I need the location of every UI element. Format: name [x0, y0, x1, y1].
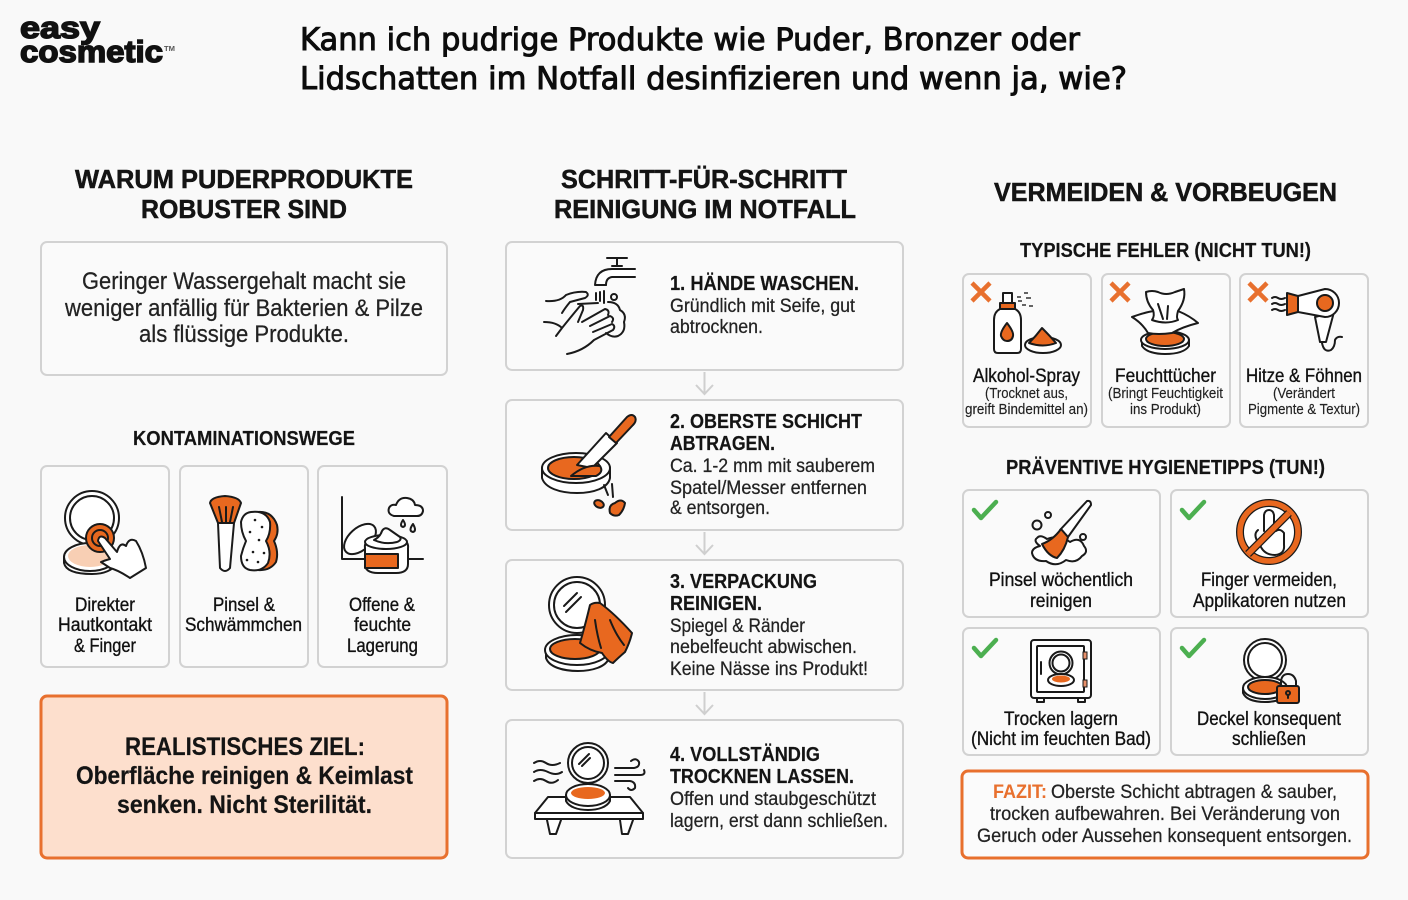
label: Applikatoren nutzen — [1193, 591, 1346, 612]
step text: Spatel/Messer entfernen — [670, 478, 867, 499]
card: alkohol-spray — [963, 274, 1091, 427]
icon: jar and cloud — [339, 497, 423, 573]
label: schließen — [1232, 729, 1306, 750]
card: hitze und foehnen — [1240, 274, 1368, 427]
label — [1197, 709, 1342, 750]
step text — [670, 272, 859, 338]
text block: geringer wassergehalt: weniger anfällig für Bakterien & Pilze — [64, 295, 423, 322]
heading: kontaminationswege: KONTAMINATIONSWEGE — [133, 428, 355, 450]
callout: fazit: trocken aufbewahren. Bei Veränderung von — [990, 803, 1340, 825]
step 1 card — [506, 242, 903, 370]
label: Schwämmchen — [185, 615, 302, 636]
callout: fazit: FAZIT: — [993, 781, 1047, 803]
text block: geringer wassergehalt: als flüssige Produkte. — [139, 321, 349, 348]
step text: 2. OBERSTE SCHICHT — [670, 411, 862, 433]
label: & Finger — [74, 636, 137, 657]
step text: 3. VERPACKUNG — [670, 571, 817, 593]
label: greift Bindemittel an) — [965, 401, 1088, 418]
arrow — [696, 532, 713, 554]
icon: check — [974, 502, 996, 518]
label: Hitze & Föhnen — [1246, 366, 1362, 387]
label: (Trocknet aus, — [985, 385, 1068, 402]
callout: fazit: Oberste Schicht abtragen & sauber, — [1051, 781, 1337, 803]
step text — [670, 411, 875, 519]
icon: check — [974, 640, 996, 656]
icon: cross — [1111, 283, 1129, 301]
callout: realistisches ziel: Oberfläche reinigen & Keimlast — [76, 762, 414, 790]
icon: washing hands — [544, 258, 635, 354]
icon: check — [1182, 640, 1204, 656]
label — [1193, 570, 1346, 612]
heading: praeventive hygienetipps: PRÄVENTIVE HYGIENETIPPS (TUN!) — [1006, 456, 1325, 479]
heading: warum puderprodukte — [75, 164, 413, 224]
step text: nebelfeucht abwischen. — [670, 637, 857, 658]
panel: vermeiden und vorbeugen — [962, 177, 1368, 858]
label — [1108, 366, 1224, 418]
card: finger vermeiden — [1171, 490, 1368, 617]
label — [1246, 366, 1362, 418]
label: Pinsel & — [213, 595, 275, 616]
heading: schritt fuer schritt: SCHRITT-FÜR-SCHRITT — [561, 164, 847, 194]
label: Feuchttücher — [1115, 366, 1217, 387]
label: (Verändert — [1273, 385, 1336, 402]
step text: Gründlich mit Seife, gut — [670, 296, 856, 317]
title: Lidschatten im Notfall desinfizieren und wenn ja, wie? — [300, 61, 1127, 97]
label — [58, 595, 153, 657]
label: Lagerung — [347, 636, 418, 657]
icon: wipes on compact — [1132, 289, 1198, 354]
logo: easy — [20, 10, 101, 45]
step 4 card — [506, 720, 903, 858]
icon: hair dryer — [1272, 289, 1342, 351]
heading: warum puderprodukte: ROBUSTER SIND — [141, 194, 347, 224]
arrow — [696, 692, 713, 714]
step 3 card — [506, 560, 903, 690]
label: Pinsel wöchentlich — [989, 570, 1133, 591]
label: Deckel konsequent — [1197, 709, 1342, 730]
logo: cosmetic — [20, 34, 163, 69]
step text: abtrocknen. — [670, 317, 763, 338]
icon: no finger sign — [1240, 503, 1298, 561]
step text: Offen und staubgeschützt — [670, 789, 877, 810]
text block: geringer wassergehalt: Geringer Wassergehalt macht sie — [82, 268, 406, 295]
label — [965, 366, 1088, 418]
panel: schritt fuer schritt — [506, 164, 903, 858]
title: Kann ich pudrige Produkte wie Puder, Bronzer oder — [300, 22, 1080, 58]
title — [300, 22, 1127, 97]
label — [971, 709, 1151, 750]
icon: compact with cloth — [545, 577, 632, 671]
label: Pigmente & Textur) — [1248, 401, 1360, 418]
step text: Spiegel & Ränder — [670, 616, 806, 637]
icon: spatula scraping powder — [542, 415, 636, 516]
heading: typische fehler: TYPISCHE FEHLER (NICHT TUN!) — [1020, 240, 1311, 262]
label — [185, 595, 302, 636]
label: Offene & — [349, 595, 415, 616]
callout: fazit: Geruch oder Aussehen konsequent entsorgen. — [977, 825, 1352, 847]
label: Trocken lagern — [1004, 709, 1118, 730]
label: Direkter — [75, 595, 136, 616]
icon: safe with compact — [1031, 640, 1091, 702]
icon: brush in suds — [1032, 501, 1091, 564]
step text: ABTRAGEN. — [670, 433, 775, 455]
card: pinsel und schwaemmchen — [180, 466, 308, 667]
label: Finger vermeiden, — [1201, 570, 1337, 591]
heading: warum puderprodukte: WARUM PUDERPRODUKTE — [75, 164, 413, 194]
icon: brush and sponge — [210, 496, 278, 571]
label: Hautkontakt — [58, 615, 153, 636]
heading: schritt fuer schritt — [554, 164, 856, 224]
icon: compact with lock — [1243, 639, 1299, 703]
icon: compact drying on table — [534, 743, 644, 834]
icon: cross — [1249, 283, 1267, 301]
step text — [670, 571, 868, 680]
logo — [20, 10, 175, 69]
arrow — [696, 372, 713, 394]
step text — [670, 743, 888, 832]
step text: 1. HÄNDE WASCHEN. — [670, 272, 859, 295]
label — [989, 570, 1133, 612]
label — [347, 595, 418, 657]
card: deckel schliessen — [1171, 628, 1368, 755]
card: trocken lagern — [963, 628, 1160, 755]
card: pinsel reinigen — [963, 490, 1160, 617]
step text: & entsorgen. — [670, 498, 770, 519]
card: feuchttuecher — [1102, 274, 1230, 427]
callout: realistisches ziel: REALISTISCHES ZIEL: — [125, 733, 365, 761]
text block: geringer wassergehalt — [41, 242, 447, 375]
label: Alkohol-Spray — [973, 366, 1080, 387]
step text: TROCKNEN LASSEN. — [670, 766, 854, 788]
label: (Nicht im feuchten Bad) — [971, 729, 1151, 750]
card: offene und feuchte lagerung — [318, 466, 447, 667]
icon: check — [1182, 502, 1204, 518]
label: (Bringt Feuchtigkeit — [1108, 385, 1224, 402]
step text: REINIGEN. — [670, 593, 762, 615]
callout: realistisches ziel — [41, 696, 447, 858]
heading: schritt fuer schritt: REINIGUNG IM NOTFALL — [554, 194, 856, 224]
label: reinigen — [1030, 591, 1092, 612]
callout: realistisches ziel: senken. Nicht Sterilität. — [117, 791, 372, 819]
step 2 card — [506, 400, 903, 530]
icon: cross — [972, 283, 990, 301]
step text: Keine Nässe ins Produkt! — [670, 659, 868, 680]
step text: 4. VOLLSTÄNDIG — [670, 743, 820, 766]
card: direkter hautkontakt — [41, 466, 169, 667]
step text: lagern, erst dann schließen. — [670, 811, 888, 832]
label: feuchte — [354, 615, 411, 636]
step text: Ca. 1-2 mm mit sauberem — [670, 456, 875, 477]
label: ins Produkt) — [1130, 401, 1201, 418]
icon: spray bottle and powder — [994, 293, 1061, 353]
callout: fazit — [962, 771, 1368, 858]
panel: warum puderprodukte robuster sind — [41, 164, 447, 858]
logo: TM — [164, 46, 175, 53]
icon: compact with finger — [64, 491, 146, 578]
heading: vermeiden und vorbeugen: VERMEIDEN & VORBEUGEN — [994, 177, 1337, 207]
